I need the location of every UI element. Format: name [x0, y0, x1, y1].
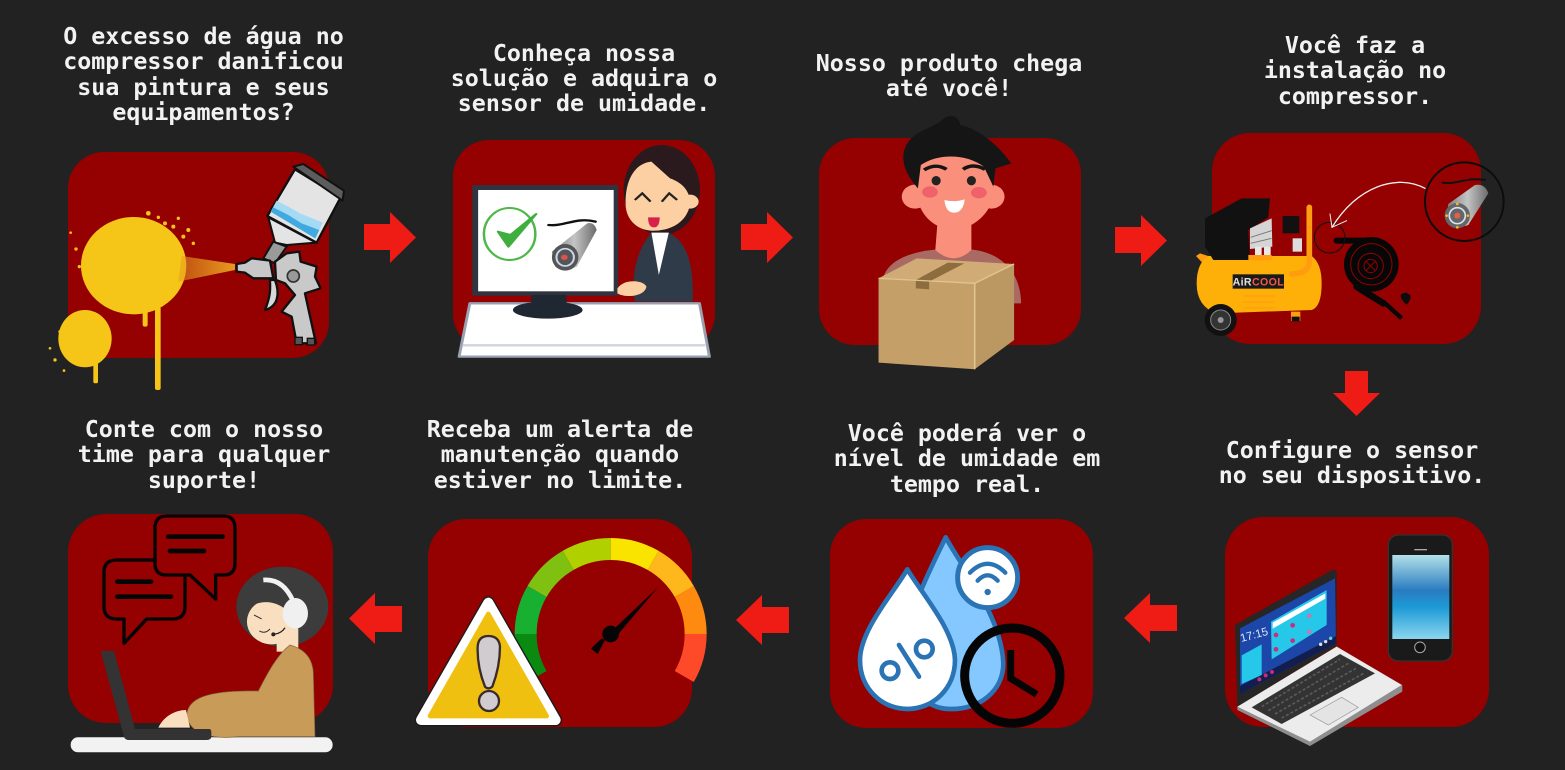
heading: step 4: Você faz a: [1285, 32, 1425, 59]
arrow: step 5 to 6: [1124, 593, 1177, 643]
heading: step 7: Receba um alerta de: [427, 416, 693, 443]
heading: step 2: sensor de umidade.: [458, 90, 710, 117]
panel: step 2 buying the sensor: [453, 140, 715, 357]
heading: step 1: O excesso de água no: [63, 23, 344, 50]
gauge needle: [591, 588, 658, 654]
icon: computer monitor: [472, 185, 618, 319]
heading: step 6: Você poderá ver o: [848, 420, 1086, 447]
spray cone: [178, 256, 235, 282]
heading: step 8: time para qualquer: [78, 441, 330, 468]
arrow: step 7 to 8: [349, 593, 402, 644]
icon: desk: [459, 303, 709, 357]
panel: step 4 installation: [1196, 133, 1504, 344]
panel: step 1 paint damage: [49, 152, 344, 390]
paint splatter: [49, 211, 195, 390]
heading: step 6: nível de umidade em: [834, 445, 1100, 472]
panel: step 7 maintenance alert: [421, 519, 707, 727]
gun body: [263, 242, 287, 263]
heading: step 2: solução e adquira o: [451, 65, 717, 92]
install point circle: [1314, 222, 1345, 253]
paint cup: [268, 217, 316, 245]
heading: step 1: compressor danificou: [63, 48, 344, 75]
heading: step 3: até você!: [886, 75, 1012, 102]
icon: support agent: [158, 567, 328, 737]
arrow: step 6 to 7: [736, 595, 789, 645]
heading: step 4: compressor.: [1278, 83, 1432, 110]
icon: air compressor: [1196, 198, 1322, 336]
icon: sensor in circle: [1425, 162, 1504, 241]
panel: step 6 real-time humidity: [830, 519, 1093, 728]
icon: desk: [71, 737, 333, 752]
icon: hose reel: [1337, 237, 1402, 318]
heading: step 2: Conheça nossa: [493, 40, 675, 67]
icon: smiling man: [884, 116, 1021, 303]
icon: chat bubbles: [104, 516, 235, 643]
compressor brand label: AiRCOOL: [1233, 276, 1284, 288]
arrow: step 4 to 5: [1333, 371, 1380, 416]
icon: smartphone: [1388, 535, 1452, 661]
heading: step 8: suporte!: [148, 467, 260, 494]
panel: step 5 device setup: [1225, 517, 1489, 746]
heading: step 5: Configure o sensor: [1226, 437, 1478, 464]
icon: woman presenting: [617, 145, 700, 302]
gauge: [515, 538, 707, 682]
heading: step 3: Nosso produto chega: [816, 50, 1082, 77]
icon: wifi badge: [958, 548, 1018, 608]
heading: step 1: equipamentos?: [112, 99, 295, 126]
panel: step 3 delivery: [819, 116, 1081, 369]
heading: step 4: instalação no: [1264, 57, 1446, 84]
heading: step 6: tempo real.: [890, 471, 1044, 498]
panel: step 8 support: [68, 514, 333, 752]
heading: step 7: estiver no limite.: [434, 467, 686, 494]
icon: cardboard box: [879, 258, 1014, 369]
heading: step 1: sua pintura e seus: [77, 74, 330, 101]
icon: paint spray gun: [49, 164, 344, 390]
arrow: step 2 to 3: [741, 212, 793, 263]
icon: laptop: [1235, 569, 1402, 746]
heading: step 7: manutenção quando: [441, 441, 679, 468]
heading: step 5: no seu dispositivo.: [1219, 462, 1485, 489]
icon: clock: [965, 628, 1060, 723]
icon: humidity drops: [860, 537, 1003, 709]
heading: step 8: Conte com o nosso: [85, 416, 323, 443]
arrow: step 3 to 4: [1115, 215, 1167, 266]
arrow: to install point: [1330, 182, 1425, 227]
arrow: step 1 to 2: [364, 212, 416, 263]
icon: laptop: [101, 651, 211, 740]
icon: water droplet: [1401, 293, 1411, 305]
icon: warning triangle: [421, 603, 556, 720]
laptop clock: 17:15: [1239, 626, 1269, 645]
